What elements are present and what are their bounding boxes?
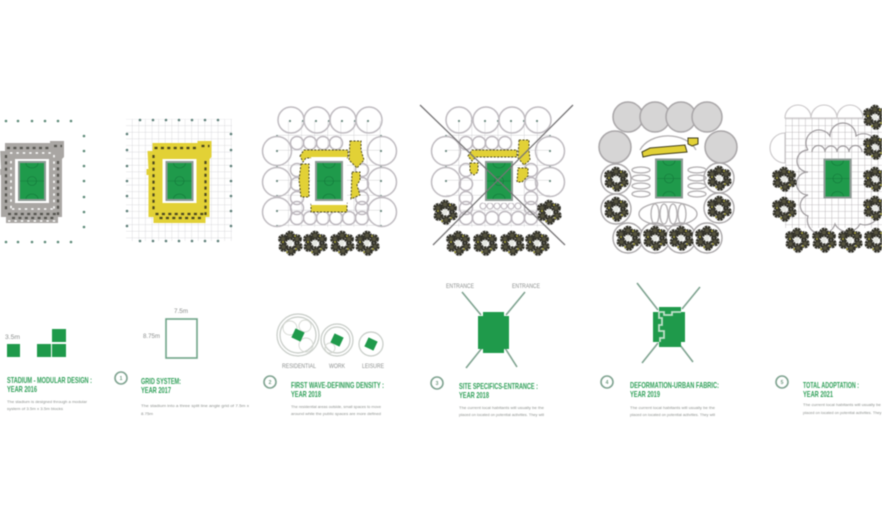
heading: STADIUM - MODULAR DESIGN : (7, 375, 92, 385)
caption block: modular design (5, 329, 92, 404)
grid dots (276, 120, 382, 227)
step number: 5 (781, 380, 784, 386)
lines (637, 283, 700, 363)
pitch (824, 158, 852, 198)
description: The residential areas outside, small spaces to move (291, 405, 381, 409)
panel: stadium modular design (0, 120, 85, 243)
pitch (653, 156, 685, 202)
cross lines (420, 105, 573, 245)
step number: 2 (269, 380, 272, 386)
yellow buildings (299, 141, 364, 212)
entrance labels (446, 284, 540, 290)
grid (277, 121, 382, 227)
small circle row (480, 203, 521, 209)
panel: total adoption (770, 105, 882, 251)
panel: grid system (126, 119, 232, 242)
fine grid (126, 119, 232, 241)
description: The current local habitants will usually be the (630, 406, 715, 410)
density labels: LEISURE (362, 364, 384, 370)
outlined circles (601, 163, 734, 253)
large circles (262, 107, 396, 226)
density diagrams (277, 314, 383, 356)
heading: GRID SYSTEM: (141, 376, 181, 386)
panel: deformation urban fabric (599, 102, 737, 253)
description line two: placed on located on potential activities. They will (630, 413, 715, 417)
large circles (432, 107, 564, 196)
entrance labels: ENTRANCE (446, 284, 474, 290)
description: The current local habitants will usually be the (803, 403, 882, 407)
trees (606, 167, 730, 249)
gray filled circles (599, 102, 737, 163)
description line two: system of 3.5m x 3.5m blocks (7, 407, 63, 411)
caption block: urban fabric (601, 283, 719, 410)
description: The current local habitants will usually be the (459, 406, 544, 410)
density labels: RESIDENTIAL (282, 364, 317, 370)
grid (446, 121, 550, 227)
dense grid (785, 118, 882, 228)
grid dots (126, 119, 232, 242)
year: YEAR 2019 (630, 389, 660, 399)
top circles (770, 105, 863, 163)
description: The stadium into a three split line angle grid of 7.5m x (141, 404, 249, 408)
pitch (483, 159, 515, 203)
trees (435, 201, 560, 254)
grid dots (445, 120, 551, 182)
description line two: 8.75m (141, 412, 153, 416)
small circles (460, 136, 538, 224)
stadium building outline (0, 141, 64, 223)
description: The stadium is designed through a modular (7, 400, 88, 404)
year: YEAR 2016 (7, 384, 37, 394)
year: YEAR 2021 (803, 389, 833, 399)
description line two: placed on located on potential activities. They will (459, 413, 544, 417)
caption block: entrance (431, 284, 544, 410)
density labels (282, 364, 384, 370)
inner pills (632, 136, 706, 226)
entrance labels: ENTRANCE (512, 284, 540, 290)
caption block: density (264, 314, 384, 409)
modular squares (7, 329, 66, 357)
deformed green block (653, 307, 685, 347)
heading: DEFORMATION-URBAN FABRIC: (630, 380, 719, 390)
step number one: 1 (120, 376, 123, 382)
green octagon block (478, 312, 509, 353)
description line two: around while the public spaces are more defined (291, 412, 381, 416)
density labels: WORK (329, 364, 345, 370)
caption block: total adoption (776, 376, 882, 407)
panel: site specifics (420, 105, 573, 254)
deformation path (659, 312, 681, 342)
entrance lines (462, 292, 525, 368)
trees (280, 232, 378, 254)
dot grid (5, 120, 85, 243)
caption block: grid system (141, 309, 249, 408)
panel: first wave density (262, 107, 396, 254)
dimension label: 3.5m (5, 335, 20, 341)
grid module box (166, 319, 197, 358)
heading: SITE SPECIFICS-ENTRANCE : (459, 381, 538, 391)
yellow buildings (468, 140, 530, 182)
height label: 8.75m (143, 334, 160, 340)
step number one (115, 372, 127, 384)
width label: 7.5m (174, 309, 188, 315)
year: YEAR 2018 (459, 390, 489, 400)
yellow strip (642, 138, 698, 157)
trees (774, 106, 882, 251)
small circles (290, 136, 368, 224)
year: YEAR 2017 (141, 385, 171, 395)
heading: FIRST WAVE-DEFINING DENSITY : (291, 380, 384, 390)
step number: 4 (606, 380, 609, 386)
year: YEAR 2018 (291, 389, 321, 399)
yellow stadium building (146, 141, 212, 223)
pitch (311, 157, 347, 205)
step number: 3 (436, 381, 439, 387)
scalloped outlines (797, 123, 878, 234)
